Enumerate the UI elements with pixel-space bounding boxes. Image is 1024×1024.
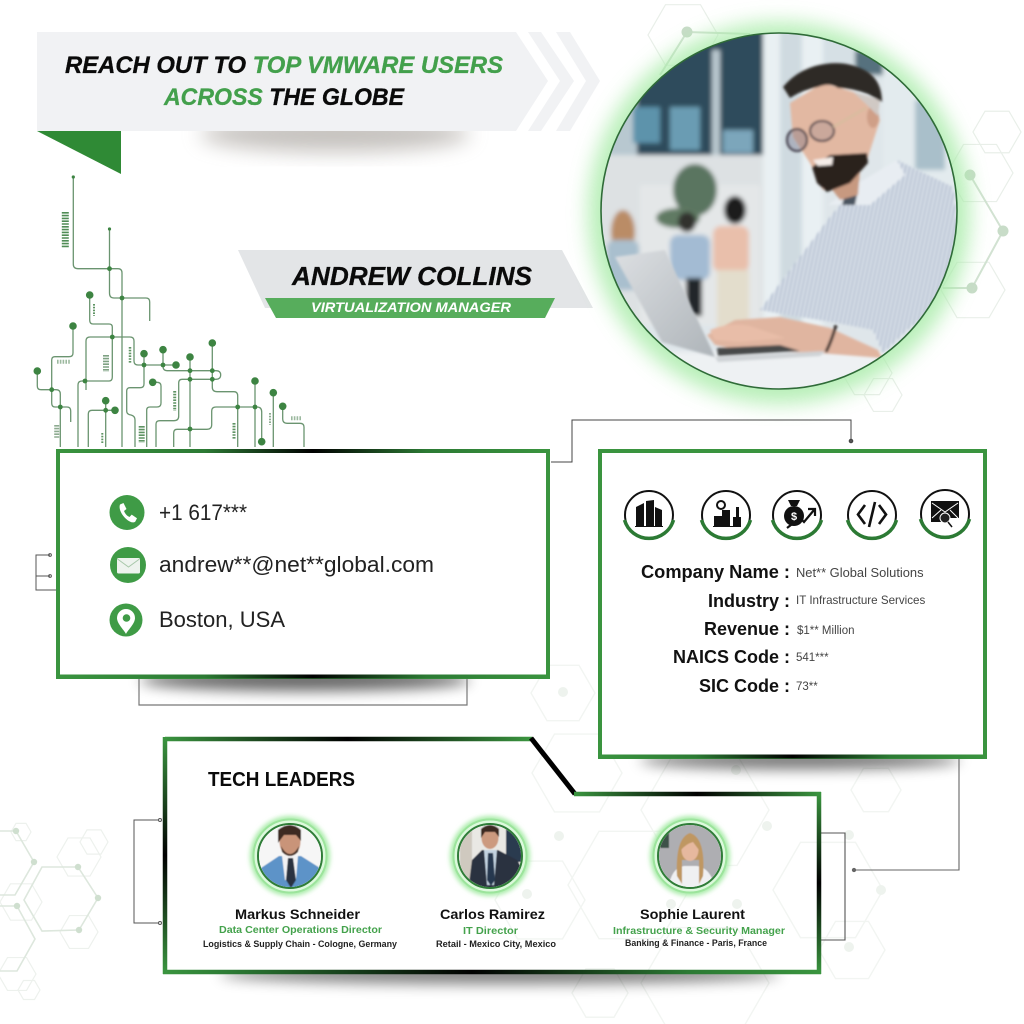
connector: leaders card right: [820, 833, 845, 940]
icon: envelope search: [920, 490, 970, 538]
name: ANDREW COLLINS: [291, 261, 533, 291]
portrait: Carlos: [450, 816, 530, 896]
portrait: Markus: [250, 816, 330, 896]
company fields: Company Name :: [641, 562, 790, 582]
title: REACH OUT TO TOP VMWARE USERS: [65, 52, 503, 79]
connector: contact card to company card: [551, 420, 853, 462]
leader: Carlos Ramirez: [436, 816, 556, 950]
leader: Sophie Laurent: [613, 816, 785, 949]
background hexagon pattern: bottom right: [495, 665, 901, 1024]
connector: leaders card left: [134, 818, 162, 924]
background hexagon pattern: bottom left: [0, 823, 108, 1000]
leaders card shadow: [220, 964, 780, 984]
heading: tech leaders: TECH LEADERS: [208, 769, 355, 791]
portrait glow: [588, 22, 970, 404]
icon: code brackets: [848, 491, 896, 539]
name: Sophie Laurent: [640, 906, 745, 922]
name ribbon: [238, 250, 593, 318]
icon: email: [110, 547, 146, 583]
industry and location: Retail - Mexico City, Mexico: [436, 939, 556, 950]
icon: revenue money bag: [772, 491, 822, 539]
industry and location: Banking & Finance - Paris, France: [625, 938, 767, 949]
role: Data Center Operations Director: [219, 924, 382, 936]
company fields: SIC Code :: [699, 676, 790, 696]
contact card shadow: [140, 669, 470, 691]
header ribbon shadow: [200, 116, 470, 152]
main portrait: man at laptop: [595, 28, 965, 398]
icon: office buildings: [624, 491, 674, 539]
text: location: Boston, USA: [159, 607, 285, 632]
title: [65, 52, 503, 111]
company fields: 73**: [796, 681, 818, 693]
connector: contact card bottom: [139, 678, 467, 705]
portrait: Sophie: [650, 816, 730, 896]
job title: VIRTUALIZATION MANAGER: [311, 299, 512, 315]
text: email address: andrew**@net**global.com: [159, 552, 434, 577]
background hexagon pattern: top right: [648, 5, 1021, 411]
leader: Markus Schneider: [203, 816, 398, 950]
icon: revenue money bag: $: [791, 511, 797, 523]
icon: location pin: [110, 604, 142, 636]
text: phone number: +1 617***: [159, 500, 247, 525]
connector: company card to leaders card: [852, 758, 959, 872]
panel: contact card: [56, 451, 550, 677]
role: IT Director: [463, 925, 518, 937]
industry and location: Logistics & Supply Chain - Cologne, Germany: [203, 939, 398, 950]
connector: contact card left side: [36, 554, 56, 590]
icon: phone: [110, 495, 144, 530]
title: ACROSS THE GLOBE: [163, 84, 405, 111]
company fields: [641, 562, 925, 696]
role: Infrastructure & Security Manager: [613, 925, 785, 937]
header chevron ribbon: [37, 32, 600, 131]
header fold triangle: [37, 131, 121, 174]
panel: company card: [598, 451, 987, 757]
name: Markus Schneider: [235, 906, 361, 922]
company fields: IT Infrastructure Services: [796, 594, 925, 607]
name: Carlos Ramirez: [440, 906, 545, 922]
company fields: Net** Global Solutions: [796, 565, 924, 580]
company fields: NAICS Code :: [673, 647, 790, 667]
panel: tech leaders card: [163, 737, 821, 974]
company fields: $1** Million: [797, 625, 855, 637]
company card shadow: [640, 751, 960, 769]
company fields: 541***: [796, 652, 829, 664]
icon: industry: [702, 491, 750, 539]
circuit board decoration: [34, 175, 304, 447]
company fields: Industry :: [708, 591, 790, 611]
company fields: Revenue :: [704, 619, 790, 639]
